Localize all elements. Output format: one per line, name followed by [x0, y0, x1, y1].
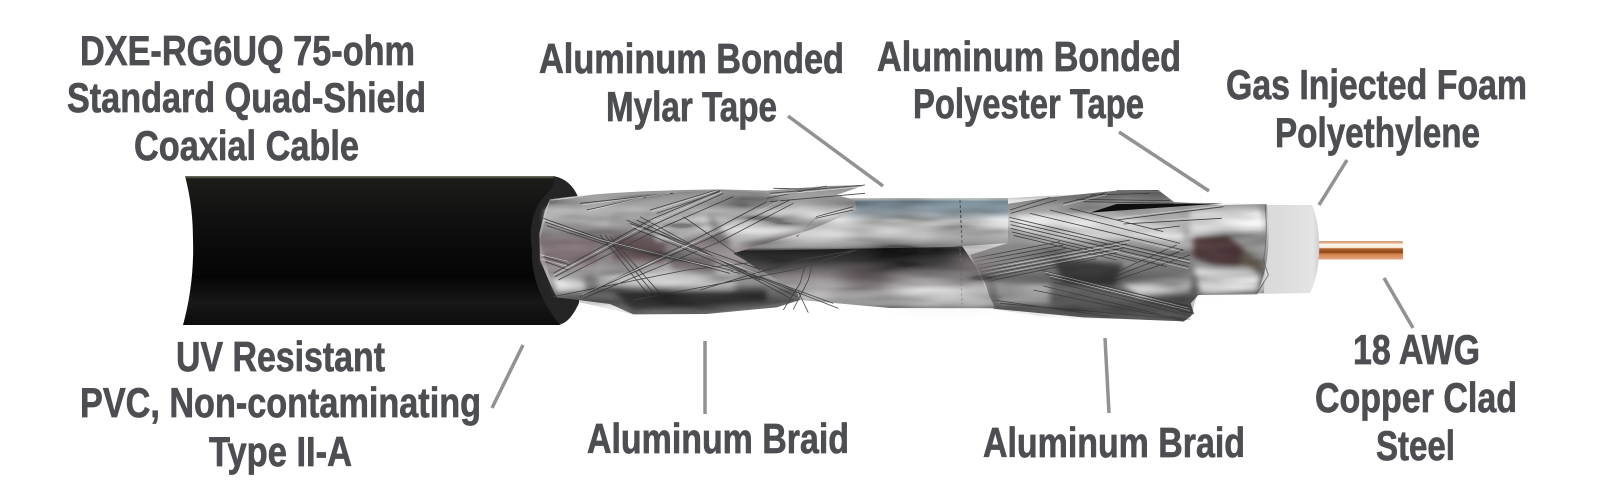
label: Gas Injected Foam Polyethylene: [1226, 61, 1527, 156]
leader line: 18 AWG Copper Clad Steel: [1384, 278, 1413, 328]
leader line: Aluminum Bonded Mylar Tape: [788, 116, 883, 186]
braid strands, right section: [973, 191, 1223, 321]
label: Aluminum Bonded Polyester Tape: [877, 33, 1181, 127]
lower tape foil highlights: [835, 254, 995, 304]
title: DXE-RG6UQ 75-ohm: [80, 27, 415, 74]
lower mylar tape: [715, 246, 995, 308]
label: Aluminum Bonded Mylar Tape: Aluminum Bonded: [539, 35, 844, 82]
cable outer jacket: [183, 176, 579, 325]
title: Standard Quad-Shield: [67, 74, 426, 121]
label: Aluminum Bonded Mylar Tape: Mylar Tape: [606, 83, 777, 130]
label: UV Resistant PVC: [80, 333, 481, 475]
label: Aluminum Bonded Mylar Tape: [539, 35, 844, 130]
label: 18 AWG Copper Clad Steel: Copper Clad: [1315, 374, 1517, 421]
braid strands, left section: [543, 185, 865, 313]
label: Gas Injected Foam Polyethylene: Gas Injected Foam: [1226, 61, 1527, 108]
label: UV Resistant PVC: UV Resistant: [176, 333, 385, 380]
title: [67, 27, 426, 169]
foil tone overlay: [540, 190, 1267, 320]
leader line: Aluminum Braid left: [703, 341, 707, 414]
foam polyethylene dielectric: [1257, 205, 1319, 294]
leader line: UV Resistant PVC: [492, 345, 523, 408]
label: Gas Injected Foam Polyethylene: Polyethylene: [1275, 109, 1480, 156]
label: Aluminum Bonded Polyester Tape: Polyester Tape: [913, 80, 1144, 127]
label: 18 AWG Copper Clad Steel: [1315, 326, 1517, 469]
inner tape and braid, cable end: [970, 190, 1269, 321]
title: Coaxial Cable: [134, 122, 359, 169]
leader line: Aluminum Braid right: [1105, 338, 1109, 413]
leader line: Gas Injected Foam Polyethylene: [1319, 160, 1347, 205]
label: Aluminum Braid left: Aluminum Braid: [587, 415, 849, 462]
label: UV Resistant PVC: Type II-A: [209, 428, 352, 475]
copper center conductor: [1314, 241, 1403, 260]
leader line: Aluminum Bonded Polyester Tape: [1119, 132, 1209, 191]
label: Aluminum Braid right: Aluminum Braid: [983, 419, 1245, 466]
label: 18 AWG Copper Clad Steel: 18 AWG: [1353, 326, 1480, 373]
label: Aluminum Bonded Polyester Tape: Aluminum Bonded: [877, 33, 1181, 80]
label: UV Resistant PVC: PVC, Non-contaminating: [80, 379, 481, 426]
outer braid and foil, left section: [539, 185, 865, 314]
upper mylar tape: [730, 198, 1008, 304]
label: 18 AWG Copper Clad Steel: Steel: [1376, 422, 1455, 469]
